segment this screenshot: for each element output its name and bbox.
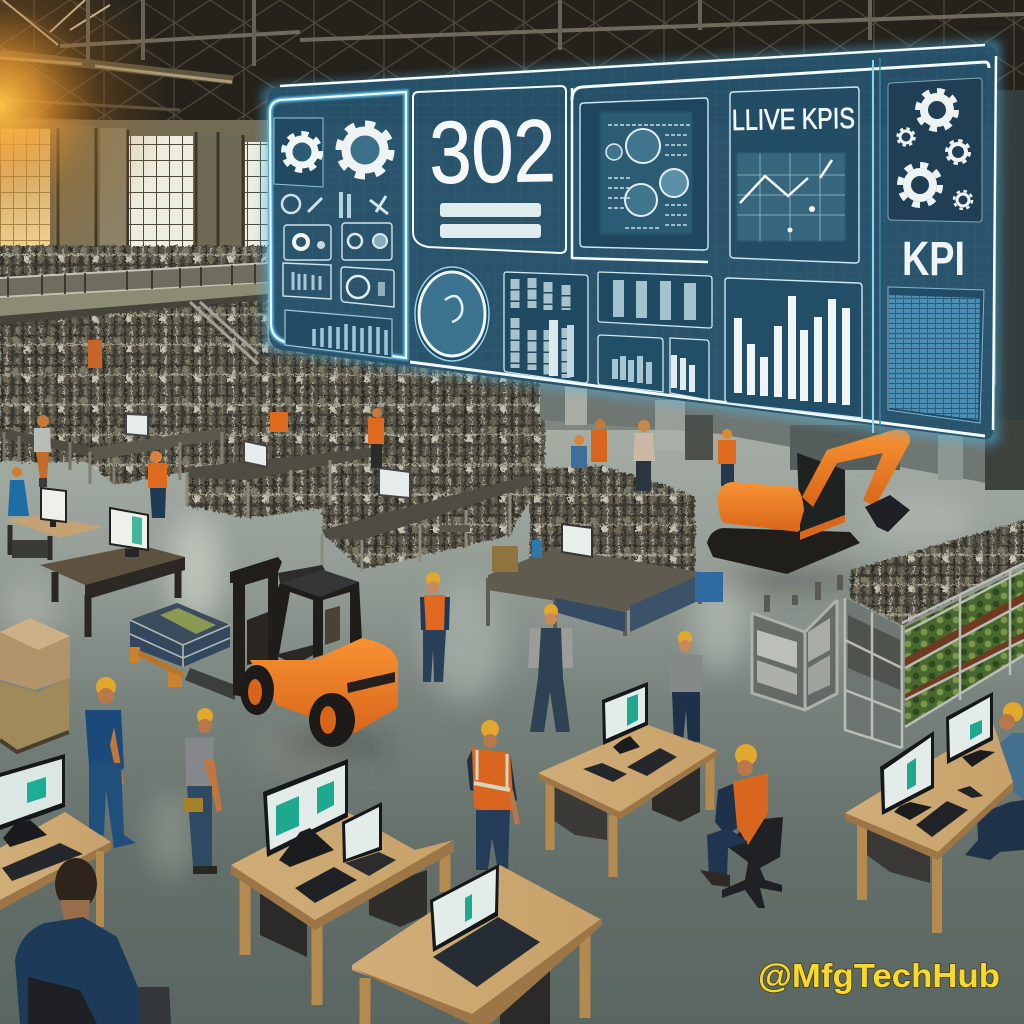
heading: live KPIs: LLIVE KPIS	[732, 103, 855, 137]
card: rings	[342, 223, 392, 260]
worker: orange vest center	[420, 572, 450, 682]
monitor	[263, 759, 348, 867]
tabletop	[352, 865, 602, 1014]
cab frame	[278, 565, 325, 583]
small desk with monitor	[6, 488, 103, 560]
panel: live KPIs card	[730, 87, 859, 263]
worker: overalls center	[528, 604, 573, 732]
mast	[230, 557, 282, 697]
forklift	[130, 557, 398, 747]
panel: dial chart card	[580, 98, 708, 250]
panel: gears card	[888, 78, 982, 222]
laptop	[430, 864, 540, 987]
glass frame	[845, 598, 902, 748]
legs	[550, 755, 710, 877]
desk under parts	[500, 960, 550, 1024]
laptop	[342, 802, 396, 876]
pallet crate	[130, 603, 230, 687]
window right	[245, 142, 268, 254]
left wall with windows	[0, 120, 268, 270]
ceiling trusses	[0, 0, 1024, 127]
icon: gear small left	[898, 128, 914, 146]
monitor	[602, 682, 648, 754]
icon: gear large top	[918, 91, 956, 129]
mezzanine walkway	[0, 263, 268, 334]
shelf top machinery	[850, 520, 1024, 625]
keyboard	[916, 801, 968, 837]
keyboard	[2, 843, 83, 881]
background machinery	[0, 300, 545, 570]
watermark handle: @MfgTechHub	[758, 957, 1000, 994]
excavator	[707, 430, 910, 574]
worker: grey shirt with tool belt	[183, 708, 222, 874]
bucket	[865, 495, 910, 532]
keyboards	[583, 763, 627, 782]
worker: blue small rear	[571, 435, 587, 468]
machine workbench: middle left	[88, 428, 230, 484]
line chart	[737, 153, 845, 241]
tabletop	[231, 826, 454, 930]
desk: foreground center with laptop	[352, 864, 602, 1024]
desk: right	[845, 692, 1013, 933]
worker: orange high rear	[88, 340, 102, 368]
worker: seated on chair	[700, 744, 783, 908]
icon: gear large lower	[900, 165, 940, 205]
tabletop	[845, 723, 1013, 852]
card: mosaic bar chart	[504, 272, 588, 383]
worker: blue overalls rear left	[8, 467, 29, 516]
metal cart	[752, 575, 840, 710]
floor workers	[85, 572, 1024, 908]
worker: orange vest center rear	[368, 408, 384, 468]
mezzanine machinery	[0, 246, 268, 282]
glowing frame lines	[270, 45, 996, 436]
desk legs	[245, 850, 445, 1005]
computer boxes	[553, 785, 607, 840]
gauge dial	[415, 267, 489, 361]
right shelves with plants	[845, 520, 1024, 748]
holographic KPI dashboard panel	[268, 45, 996, 439]
monitor	[0, 754, 65, 847]
card: bottom mini bars	[285, 310, 392, 358]
desk: center right	[538, 682, 717, 877]
factory floor	[0, 430, 1024, 1024]
tabletop	[538, 725, 717, 812]
tracks	[707, 528, 860, 574]
small icons row	[282, 192, 388, 218]
chair back	[28, 977, 97, 1024]
computer box	[867, 827, 930, 883]
panel: left gears column	[274, 118, 394, 358]
floor light reflections	[0, 494, 975, 880]
dark desk with monitor	[40, 508, 185, 637]
worker: beige shirt	[633, 420, 655, 491]
upper left desks	[6, 488, 185, 637]
icon: gear two	[339, 124, 391, 176]
orange body	[250, 638, 398, 733]
worker: orange small rear	[591, 419, 607, 462]
chair	[722, 817, 783, 908]
keyboard	[295, 867, 357, 903]
foreground seated man	[15, 858, 171, 1024]
panel: data table	[888, 287, 984, 423]
KPI label: KPI	[902, 233, 965, 286]
boom	[802, 430, 910, 507]
cab	[797, 453, 845, 532]
card: bar chart	[725, 278, 862, 418]
worker: orange rear machinery	[270, 412, 288, 432]
rear monitors	[126, 414, 410, 498]
text lines	[440, 203, 541, 238]
staircase	[190, 302, 258, 364]
worker: orange vest foreground	[467, 720, 520, 870]
302 value: 302	[429, 101, 556, 202]
desk: laptop and monitor	[231, 759, 454, 1005]
holographic panel glow	[268, 45, 995, 440]
card: ring	[341, 267, 394, 307]
cardboard boxes	[0, 618, 70, 752]
machine station with monitor	[488, 465, 723, 636]
machine workbench: center	[322, 468, 560, 572]
card: small bars one	[598, 335, 663, 392]
worker: orange vest near excavator	[718, 429, 736, 486]
card: small gear	[284, 225, 331, 260]
mouse pad	[957, 786, 983, 798]
window left	[0, 128, 50, 246]
monitor right	[946, 692, 995, 767]
wheels	[240, 665, 274, 715]
worker: white shirt rear left	[34, 415, 51, 487]
plant beds	[905, 568, 1024, 727]
worker: blue overalls left	[85, 677, 136, 848]
legs	[862, 822, 937, 933]
desk: foreground left	[0, 754, 111, 927]
rear workers	[8, 340, 736, 518]
machine workbench: long	[185, 448, 376, 518]
card: striped bars	[598, 272, 712, 328]
monitor left	[880, 731, 934, 820]
sunlight glow top left	[0, 0, 200, 260]
worker: seated far right	[965, 702, 1024, 860]
body	[718, 482, 804, 532]
worker: orange vest rear	[148, 451, 167, 518]
back wall right under panel	[540, 375, 1024, 490]
icon: gear small lower	[954, 191, 972, 209]
fork plate	[185, 668, 235, 700]
far right wall	[996, 90, 1024, 420]
machine workbench: rear left	[0, 428, 88, 470]
window center	[129, 136, 193, 257]
worker: grey shirt near cart	[670, 631, 702, 742]
card: small bars	[283, 263, 331, 299]
computer boxes	[260, 893, 307, 957]
icon: gear medium right	[946, 140, 970, 164]
panel: big number	[429, 101, 556, 238]
card: small bars two	[670, 338, 709, 400]
card: gear one	[274, 118, 323, 187]
